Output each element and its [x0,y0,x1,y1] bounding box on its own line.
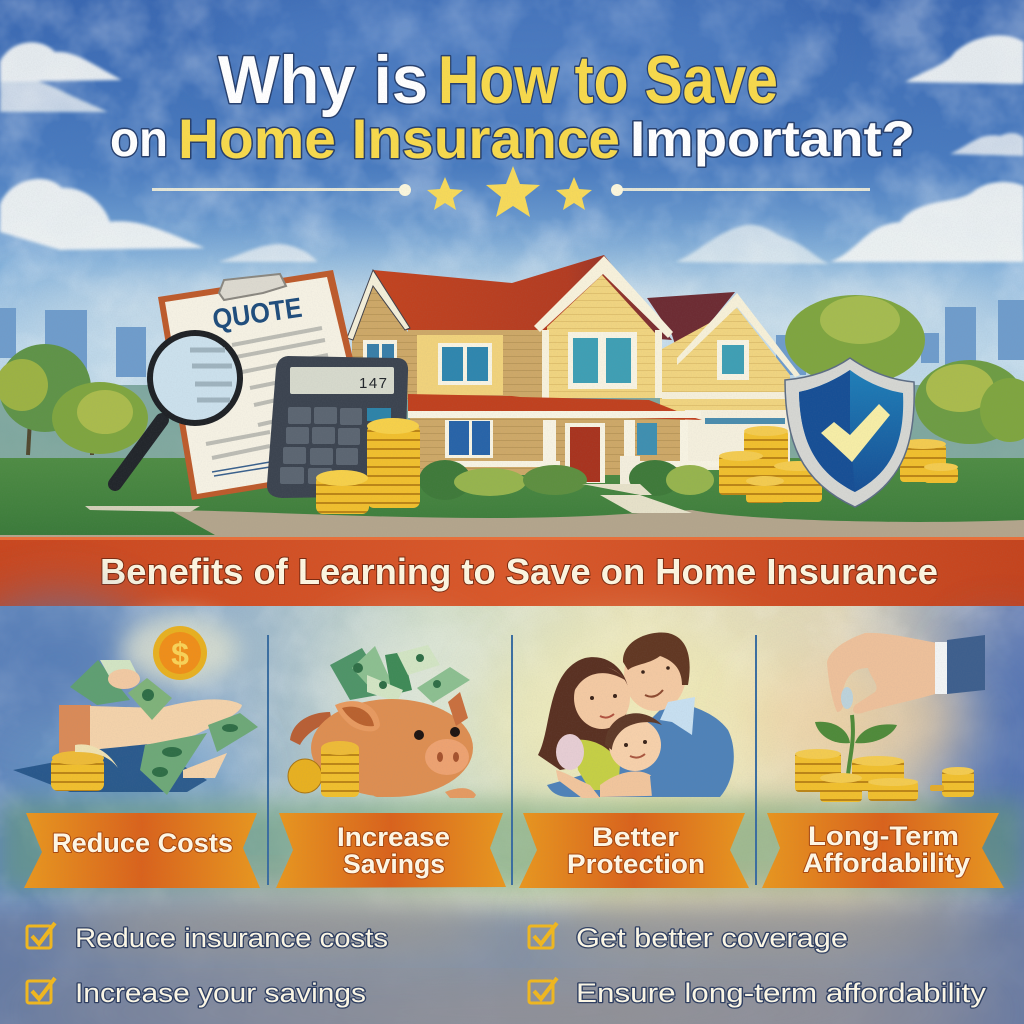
icon: coin stacks [795,749,974,802]
icon: coin stacks [288,741,359,797]
calculator display number: 147 [359,375,387,392]
icon: piggy bank [290,692,476,798]
title: How to Save [438,42,778,118]
house: upper windows [363,332,749,389]
shadow under hand [13,743,207,792]
father arm [600,770,690,797]
shrubs and walkway [419,460,714,513]
panel: reduce costs [13,626,260,888]
ribbon: increase savings: Savings [343,849,445,879]
ribbon: better protection [519,813,749,888]
title [110,42,915,170]
house: porch railing [440,461,720,467]
coin stacks near calculator [316,418,420,514]
icon: family hug [538,632,734,798]
calculator [267,356,408,498]
title: on [110,111,168,167]
magnifying glass [115,333,240,484]
ribbon: increase savings: Increase [337,822,450,852]
check item: ensure long-term affordability: Ensure long-term affordability [576,978,987,1008]
clipboard with quote [158,270,378,500]
panel dividers [267,635,757,885]
benefits banner [0,537,1024,606]
icon: cash in piggy [330,645,470,703]
check item: get better coverage: Get better coverage [576,923,848,953]
father head [624,639,686,711]
ribbon: better protection: Protection [567,849,705,879]
check item: increase your savings: Increase your savings [75,978,366,1008]
house: main gable [534,256,673,398]
title: Why is [218,42,428,118]
icon: hand giving money [59,660,258,795]
mother face [574,667,630,729]
house: main red roof [373,255,672,340]
panel: better protection [519,632,749,888]
icon: hand planting [827,633,985,714]
panel: long-term affordability [762,633,1004,888]
house: porch roof [408,394,702,420]
mother hair [538,657,629,770]
child [609,719,661,771]
paper clip [219,274,286,300]
house [347,255,800,486]
city skyline [0,300,1024,377]
icon: coin stack [51,744,118,791]
benefits banner: Benefits of Learning to Save on Home Insurance [100,551,938,592]
panel: increase savings [276,645,506,888]
quote label: QUOTE [211,292,304,335]
ribbon: long-term affordability [762,813,1004,888]
icon: dollar coin [153,626,207,680]
clouds [0,35,1024,264]
trees [0,295,1024,470]
house: right wing [647,292,800,470]
stars divider [152,166,870,217]
father body [547,700,734,797]
coin stacks near shield [719,426,958,503]
house: lower storey [410,392,790,483]
ribbon: reduce costs: Reduce Costs [52,828,233,858]
shield with check [785,358,914,507]
icon: dollar coin: $ [171,636,189,672]
ribbon: increase savings [276,813,506,888]
title: Important? [630,111,915,167]
ribbon: better protection: Better [592,822,680,852]
icon: sprout [815,715,897,775]
ribbon: reduce costs [24,813,260,888]
sky background [0,0,1024,480]
ribbon: long-term affordability: Affordability [803,848,970,878]
title: Home Insurance [178,107,620,170]
lawn and road [0,458,1024,538]
check item: reduce insurance costs: Reduce insurance costs [75,923,388,953]
ribbon: long-term affordability: Long-Term [808,821,959,851]
house: left wing walls [352,282,553,400]
mother dress [575,740,620,790]
lower background [0,600,1024,1024]
checklist [27,923,987,1008]
